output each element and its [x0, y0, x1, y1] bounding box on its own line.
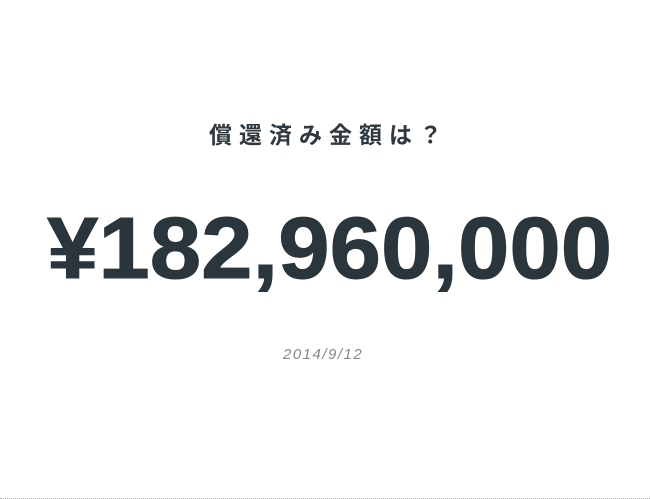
amount: ¥182,960,000: [47, 200, 612, 297]
date: 2014/9/12: [283, 346, 363, 363]
heading: 償還済み金額は？: [209, 122, 449, 148]
bottom dotted line: [0, 498, 650, 499]
